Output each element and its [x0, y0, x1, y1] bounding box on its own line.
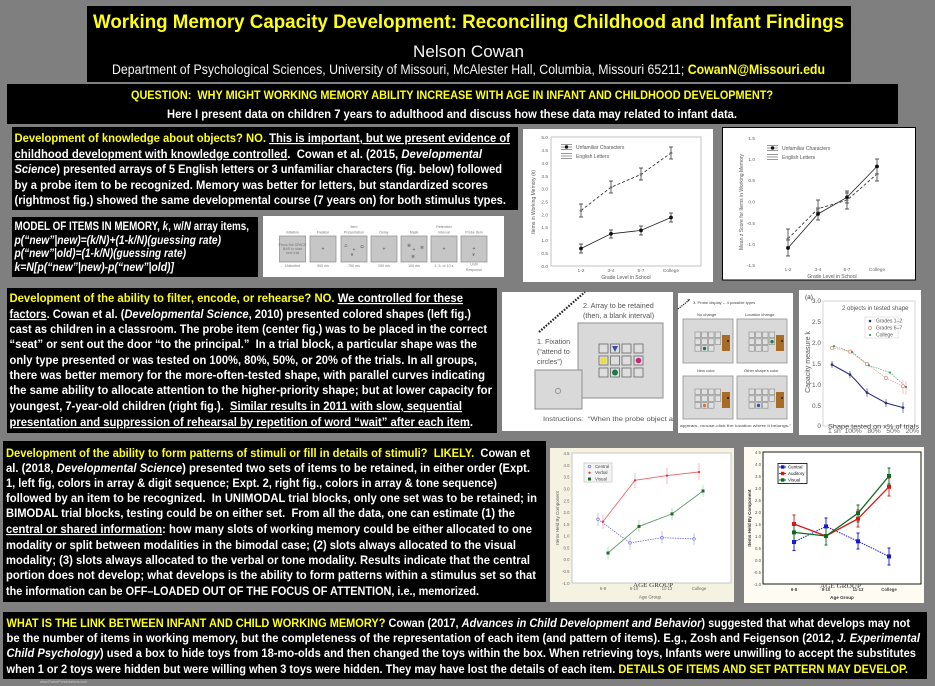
panel: form patterns of stimuli: modality; (3) slots always allocated to the verbal or tone modality. Results indicate that the central — [6, 553, 530, 567]
panel: link between infant and child working memory — [3, 612, 927, 679]
question banner — [7, 84, 898, 124]
chart: mean z score by grade: 3-4 — [815, 267, 822, 273]
panel: link between infant and child working memory: WHAT IS THE LINK BETWEEN INFANT AND CHILD WORKING MEMORY? Cowan (2017, Advances in Child Development and Behavior) suggested that what develops may not — [6, 616, 910, 630]
chart: items held by component, auditory: 3.0 — [755, 486, 762, 491]
chart: capacity measure k: 0.5 — [812, 403, 821, 410]
panel: ability to filter, encode, rehearse: youngest, 7-year-old children (right fig.). Similar results in 2011 with slow, sequential — [10, 399, 462, 413]
figure: trial procedure timeline: Fixation — [317, 230, 329, 234]
figure: trial procedure timeline: Until — [470, 262, 478, 266]
panel: link between infant and child working memory: be the number of items in working memory, but the completeness of the representation of each item (and pattern of items). E.g., Zosh and Feigenson (2012, J. Experimental — [6, 631, 921, 645]
figure: trial procedure timeline: Retention — [436, 225, 452, 229]
chart: mean z score by grade: College — [869, 267, 885, 273]
chart: items in working memory by grade: 5-7 — [638, 268, 645, 274]
panel: knowledge about objects: Development of knowledge about objects? NO. This is important, but we present evidence of — [14, 131, 510, 145]
panel: form patterns of stimuli: modality or split between modalities in the bimodal case; (2) slots always allocated to the visual — [6, 538, 516, 552]
chart: items held by component, auditory: Visual — [788, 478, 800, 483]
chart: capacity measure k: Shape tested on x% of trials — [828, 424, 919, 430]
chart: capacity measure k: 1.5 — [812, 361, 821, 368]
panel: ability to filter, encode, rehearse — [7, 288, 497, 433]
chart: items in working memory by grade: 0.5 — [541, 251, 548, 257]
chart: mean z score by grade: English Letters — [782, 155, 816, 161]
chart: items in working memory by grade: 5.0 — [541, 135, 548, 141]
figure: trial procedure timeline: ¥ — [472, 252, 475, 257]
chart: items held by component, auditory: 4.0 — [755, 462, 762, 467]
chart: items held by component, auditory: 2.5 — [755, 498, 762, 503]
chart: capacity measure k — [799, 290, 921, 435]
figure: trial procedure timeline: 1, 5, or 10 s — [435, 264, 454, 268]
chart: items held by component, auditory: 11-13 — [853, 587, 864, 592]
chart: mean z score by grade: 1.5 — [748, 136, 755, 142]
figure: array to be retained: Instructions: “When the probe object a — [543, 416, 673, 423]
chart: items held by component, verbal: -1.0 — [562, 581, 570, 586]
chart: mean z score by grade: 0.5 — [748, 178, 755, 184]
panel: form patterns of stimuli — [3, 441, 546, 602]
chart: items held by component, verbal: 6-8 — [600, 586, 607, 591]
chart: items held by component, verbal: 3.5 — [564, 474, 570, 480]
chart: capacity measure k: 1 sh 100% 80% 50% 20% — [828, 429, 920, 435]
figure: probe display types: No change — [697, 312, 717, 317]
chart: capacity measure k: 2 objects in tested shape — [842, 306, 909, 312]
figure: probe display types: Other shape's color — [744, 368, 779, 373]
panel: form patterns of stimuli: portion does not develop; what develops is the ability to form patterns within a stimulus set so that — [6, 568, 536, 582]
figure: trial procedure timeline: Presentation — [344, 230, 364, 234]
chart: items held by component, verbal: Visual — [595, 476, 607, 482]
watermark: www.PosterPresentations.com — [40, 680, 87, 684]
author: Nelson Cowan — [413, 42, 524, 61]
figure: probe display types: appears, mouse-click the location where it belongs.” — [680, 423, 792, 428]
figure: trial procedure timeline: + — [443, 246, 446, 252]
panel: link between infant and child working memory: when 1 or 2 toys were hidden but were willing when 3 toys were hidden. They may have lost the details of each item. DETAILS OF ITEMS AND SET PATTERN MAY DEVELOP. — [6, 662, 908, 676]
figure: array to be retained: 2. Array to be retained — [583, 301, 654, 310]
chart: items held by component, auditory: Age Group — [830, 595, 854, 600]
chart: items held by component, auditory: 0.0 — [755, 558, 762, 563]
chart: items held by component, auditory: 4.5 — [755, 450, 762, 455]
affiliation: Department of Psychological Sciences, University of Missouri, McAlester Hall, Columbia, Missouri 65211; CowanN@Missouri.edu — [112, 62, 825, 77]
title block — [87, 6, 851, 82]
chart: capacity measure k: College — [876, 333, 893, 339]
figure: array to be retained: (then, a blank interval) — [583, 311, 654, 320]
panel: model of items in memory — [12, 217, 258, 277]
chart: items held by component, auditory: 3.5 — [755, 474, 762, 479]
chart: items in working memory by grade — [523, 129, 713, 282]
chart: items held by component, verbal: Central — [595, 464, 609, 469]
panel: knowledge about objects: childhood development with knowledge controlled. Cowan et al. (2015, Developmental — [14, 147, 483, 161]
chart: items held by component, verbal: College — [692, 586, 707, 591]
chart: items held by component, auditory: Central — [788, 465, 803, 470]
chart: capacity measure k: (a) — [805, 294, 813, 301]
chart: items held by component, auditory: College — [881, 587, 897, 592]
chart: capacity measure k: 0 — [817, 423, 821, 430]
figure: trial procedure timeline: ✻ — [407, 243, 411, 248]
chart: items in working memory by grade: 1.0 — [541, 238, 548, 244]
chart: items in working memory by grade: 3.0 — [541, 186, 548, 192]
chart: items held by component, verbal: 2.5 — [564, 498, 570, 503]
chart: capacity measure k: 2.0 — [812, 340, 821, 347]
chart: items in working memory by grade: Items in Working Memory (k) — [531, 170, 537, 234]
chart: items held by component, auditory: Auditory — [788, 471, 805, 476]
chart: mean z score by grade: -1.5 — [747, 263, 755, 269]
chart: mean z score by grade: -1.0 — [747, 242, 755, 248]
panel: form patterns of stimuli: Development of the ability to form patterns of stimuli or fill in details of stimuli? LIKELY. Cowan et — [6, 446, 530, 460]
figure: trial procedure timeline: + — [353, 247, 356, 253]
question: QUESTION: WHY MIGHT WORKING MEMORY ABILITY INCREASE WITH AGE IN INFANT AND CHILDHOOD DEVELOPMENT? — [131, 88, 773, 102]
chart: items held by component, auditory: 1.0 — [755, 534, 762, 539]
chart: items held by component, verbal: 2.0 — [564, 510, 570, 515]
chart: items held by component, verbal: 9-10 — [630, 586, 639, 591]
panel: ability to filter, encode, rehearse: “seat” or sent out the door “to the principal.” In a trial block, a particular shape was the — [10, 337, 477, 351]
chart: items held by component, auditory: 0.5 — [755, 546, 762, 551]
chart: items held by component, auditory: 6-8 — [791, 587, 798, 592]
chart: items held by component, auditory: 1.5 — [755, 522, 762, 527]
chart: items held by component, verbal: 11-13 — [662, 586, 673, 591]
panel: ability to filter, encode, rehearse: cast as children in a classroom. The probe item (center fig.) was to be placed in the correct — [10, 322, 487, 336]
chart: mean z score by grade: 1-2 — [785, 267, 792, 273]
panel: form patterns of stimuli: 1, left fig, colors in array & digit sequence; Expt. 2, right fig., colors in array & tone sequence) — [6, 476, 497, 490]
panel: model of items in memory: p(“new”|old)=(1-k/N)(guessing rate) — [14, 246, 186, 260]
figure: trial procedure timeline: + — [413, 247, 416, 253]
panel: ability to filter, encode, rehearse: the same ability to allocate attention to the higher-priority shape; but at lower capacity for — [10, 383, 492, 397]
figure: trial procedure timeline: 750 ms — [348, 264, 360, 268]
panel: form patterns of stimuli: central or shared information: how many slots of working memory could be either allocated to one — [6, 522, 532, 536]
figure: trial procedure timeline: 500 ms — [317, 264, 329, 268]
panel: form patterns of stimuli: the information can be OFF–LOADED OUT OF THE FOCUS OF ATTENTION, i.e., memorized. — [6, 584, 479, 598]
chart: items in working memory by grade: 4.5 — [541, 148, 548, 154]
chart: items held by component, verbal: -0.5 — [562, 569, 570, 574]
figure: array to be retained — [502, 292, 673, 431]
panel: ability to filter, encode, rehearse: only type presented or was tested on 100%, 80%, 50%, or 20% of the trials. In all groups, — [10, 353, 477, 367]
chart: capacity measure k: Grades 1–2 — [876, 319, 902, 325]
figure: probe display types: Location change — [745, 312, 775, 317]
chart: items held by component, auditory: 2.0 — [755, 510, 762, 515]
chart: items in working memory by grade: Unfamiliar Characters — [576, 145, 625, 151]
figure: trial procedure timeline: next trial — [286, 251, 299, 255]
chart: items held by component, verbal: 4.5 — [564, 451, 570, 456]
panel: knowledge about objects — [12, 127, 518, 210]
figure: trial procedure timeline: Interval — [438, 230, 450, 234]
chart: items in working memory by grade: 2.5 — [541, 200, 548, 206]
panel: model of items in memory: p(“new”|new)=(k/N)+(1-k/N)(guessing rate) — [14, 233, 221, 247]
panel: form patterns of stimuli: followed by an item to be recognized. In UNIMODAL trial blocks, only one set was to be retained; in — [6, 491, 537, 505]
chart: items held by component, auditory: -0.5 — [754, 570, 762, 575]
figure: trial procedure timeline: + — [322, 246, 325, 252]
chart: items held by component, verbal: AGE GROUP — [633, 582, 673, 589]
chart: capacity measure k: Capacity measure k — [805, 331, 812, 393]
chart: items held by component, verbal: 0.5 — [564, 546, 570, 550]
chart: mean z score by grade: -0.5 — [747, 221, 755, 227]
chart: items in working memory by grade: Grade Level in School — [601, 275, 651, 281]
figure: trial procedure timeline: + — [383, 246, 386, 252]
figure: trial procedure timeline: ¥ — [351, 252, 354, 257]
chart: mean z score by grade: Grade Level in School — [807, 274, 857, 280]
figure: trial procedure timeline: BAR to start — [283, 247, 302, 251]
figure: trial procedure timeline: Unlimited — [285, 264, 300, 268]
chart: items held by component, auditory: -1.0 — [754, 582, 762, 587]
figure: trial procedure timeline: Probe Item — [465, 230, 483, 234]
chart: items in working memory by grade: 1-2 — [578, 268, 585, 274]
figure: trial procedure timeline: 250 ms — [378, 264, 390, 268]
panel: form patterns of stimuli: BIMODAL trial blocks, testing could be on either set. From all the data, one can estimate (1) the — [6, 506, 515, 520]
figure: probe display types: New color — [697, 368, 715, 373]
panel: knowledge about objects: (rightmost fig.) showed the same developmental course (7 years on) for both stimulus types. — [14, 193, 506, 207]
chart: mean z score by grade — [722, 128, 916, 280]
chart: items held by component, verbal: Items Held By Component — [555, 490, 560, 545]
chart: items held by component, verbal — [550, 448, 734, 602]
panel: ability to filter, encode, rehearse: presentation and suppression of rehearsal by repetition of word “wait” after each item. — [10, 415, 473, 429]
chart: items in working memory by grade: 1.5 — [541, 225, 548, 231]
chart: items held by component, auditory — [744, 447, 924, 603]
chart: items in working memory by grade: 3.5 — [541, 174, 548, 180]
chart: items held by component, verbal: Verbal — [595, 470, 607, 475]
chart: mean z score by grade: 5-7 — [844, 267, 851, 273]
panel: ability to filter, encode, rehearse: factors. Cowan et al. (Developmental Science, 2010) presented colored shapes (left fig.) — [10, 307, 471, 321]
question subtext: Here I present data on children 7 years to adulthood and discuss how these data may related to infant data. — [167, 107, 737, 121]
panel: ability to filter, encode, rehearse: there was better memory for the more-often-tested shape, with parallel curves indicating — [10, 368, 485, 382]
chart: items in working memory by grade: 0.0 — [541, 264, 548, 270]
chart: items in working memory by grade: 3-4 — [608, 268, 615, 274]
panel: knowledge about objects: Science) presented arrays of 5 English letters or 3 unfamiliar characters (fig. below) followed — [14, 162, 502, 176]
panel: ability to filter, encode, rehearse: Development of the ability to filter, encode, or rehearse? NO. We controlled for these — [10, 291, 463, 305]
panel: model of items in memory: MODEL OF ITEMS IN MEMORY, k, w/N array items, — [14, 219, 249, 233]
figure: trial procedure timeline: Initiation — [286, 230, 299, 234]
title: Working Memory Capacity Development: Reconciling Childhood and Infant Findings — [93, 11, 844, 33]
chart: mean z score by grade: 0.0 — [748, 200, 755, 206]
chart: items held by component, auditory: 9-10 — [822, 587, 831, 592]
figure: array to be retained: circles”) — [537, 357, 562, 366]
chart: items held by component, verbal: Age Group — [639, 594, 662, 600]
chart: capacity measure k: 2.5 — [812, 319, 821, 326]
chart: items in working memory by grade: English Letters — [576, 154, 610, 160]
chart: mean z score by grade: Unfamiliar Characters — [782, 146, 831, 152]
chart: items held by component, verbal: 4.0 — [564, 463, 570, 468]
figure: trial procedure timeline: Response — [466, 268, 482, 272]
chart: items held by component, auditory: Items Held By Component — [747, 489, 752, 547]
chart: items held by component, verbal: 1.0 — [564, 534, 570, 538]
figure: trial procedure timeline: Press the SPACE — [278, 243, 307, 247]
chart: items in working memory by grade: College — [663, 268, 679, 274]
figure: probe display types: 3. Probe display -- 4 possible types — [693, 300, 755, 305]
chart: capacity measure k: 1.0 — [812, 382, 821, 389]
chart: items in working memory by grade: 4.0 — [541, 161, 548, 167]
figure: trial procedure timeline: Ω — [360, 244, 364, 249]
figure: trial procedure timeline: ග — [344, 243, 348, 248]
chart: items held by component, verbal: 3.0 — [564, 486, 570, 492]
figure: trial procedure timeline: Delay — [379, 230, 389, 234]
chart: items held by component, verbal: 0.0 — [564, 557, 570, 562]
figure: trial procedure timeline: ✻ — [411, 254, 415, 259]
chart: items held by component, verbal: 1.5 — [564, 522, 570, 527]
panel: model of items in memory: k=N[p(“new”|new)-p(“new”|old)] — [14, 260, 175, 274]
figure: trial procedure timeline: ✻ — [420, 245, 424, 250]
chart: items in working memory by grade: 2.0 — [541, 212, 548, 218]
figure: trial procedure timeline: + — [473, 246, 476, 252]
figure: trial procedure timeline: Mask — [410, 230, 418, 234]
chart: mean z score by grade: Mean z Score for Items in Working Memory — [739, 153, 745, 250]
chart: capacity measure k: 3.0 — [812, 298, 821, 305]
figure: array to be retained: (“attend to — [537, 347, 570, 356]
panel: form patterns of stimuli: al. (2018, Developmental Science) presented two sets of items to be retained, in either order (Expt. — [6, 461, 530, 475]
panel: knowledge about objects: by a probe item to be recognized. Memory was better for letters, but standardized scores — [14, 178, 488, 192]
chart: capacity measure k: Grades 6–7 — [876, 326, 902, 332]
figure: trial procedure timeline: 100 ms — [408, 264, 420, 268]
figure: trial procedure timeline: Item — [350, 225, 358, 229]
figure: array to be retained: 1. Fixation — [537, 337, 570, 346]
chart: mean z score by grade: 1.0 — [748, 157, 755, 163]
figure: trial procedure timeline — [263, 216, 504, 277]
figure: probe display types — [678, 293, 793, 433]
chart: items held by component, auditory: AGE GROUP — [820, 583, 861, 590]
